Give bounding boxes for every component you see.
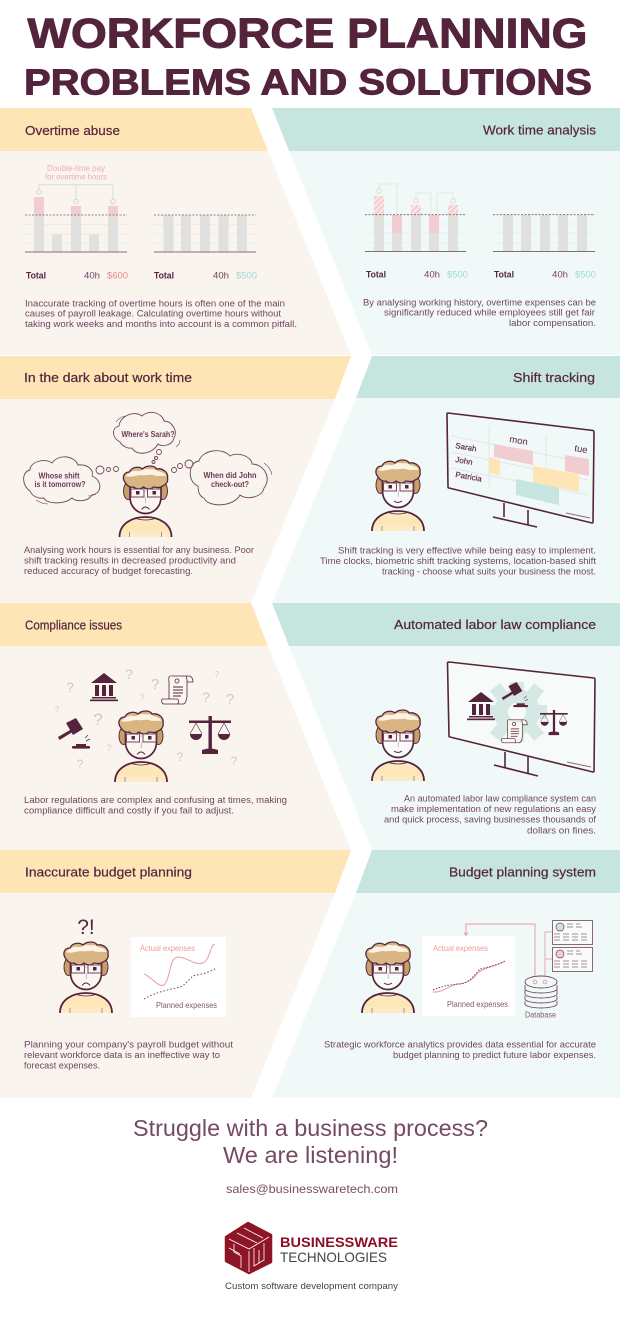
line chart: matched expenses — [422, 936, 515, 1016]
monitor with shift schedule: Sarah — [455, 441, 477, 454]
icon: happy person — [372, 710, 424, 781]
icon: gavel — [58, 718, 90, 749]
icon: gear — [487, 682, 547, 742]
text: automated compliance description: An automated labor law compliance system can — [404, 794, 596, 804]
text: shift tracking description: Time clocks, biometric shift tracking systems, location-based shift — [320, 556, 596, 567]
text: overtime abuse description: causes of payroll leakage. Calculating overtime hours without — [25, 309, 281, 320]
text: shift tracking description — [320, 546, 596, 578]
line chart: actual vs planned expenses: Actual expenses — [140, 943, 195, 953]
monitor with shift schedule: John — [455, 455, 473, 467]
question marks: ? — [66, 679, 74, 695]
header: overtime abuse — [0, 108, 268, 151]
header: budget planning system — [356, 850, 620, 893]
text: compliance issues description — [24, 795, 287, 816]
logo: businessware technologies: BUSINESSWARE — [280, 1234, 398, 1250]
line chart: matched expenses: Planned expenses — [447, 999, 508, 1009]
line chart: actual vs planned expenses: Planned expenses — [156, 1000, 217, 1010]
header: inaccurate budget planning: Inaccurate budget planning — [25, 864, 192, 880]
bar chart: redistributed hours: $500 — [447, 270, 468, 280]
contact email: sales@businesswaretech.com — [226, 1182, 398, 1196]
icon: scales — [189, 716, 231, 754]
thought bubbles: check-out? — [211, 479, 249, 489]
text: in the dark description: Analysing work hours is essential for any business. Poor — [24, 545, 255, 556]
call to action heading — [133, 1115, 488, 1168]
thought bubbles: is it tomorrow? — [34, 479, 86, 489]
text: in the dark description — [24, 545, 255, 577]
text: shift tracking description: Shift tracking is very effective while being easy to implement. — [338, 546, 596, 556]
icon: employee cards — [552, 920, 592, 972]
connector: cards to database — [545, 932, 552, 980]
text: inaccurate budget description: Planning your company's payroll budget without — [24, 1040, 233, 1050]
question marks: ? — [125, 666, 133, 682]
text: inaccurate budget description — [24, 1040, 233, 1072]
text: automated compliance description: make implementation of new regulations an easy — [391, 804, 596, 815]
title: WORKFORCE PLANNING — [28, 10, 588, 56]
bar chart: even hours — [493, 215, 596, 280]
header: work time analysis: Work time analysis — [483, 122, 597, 138]
bar chart: regular hours: Total — [154, 270, 174, 280]
line chart: matched expenses: Actual expenses — [433, 943, 488, 953]
panel: in the dark about work time — [0, 356, 351, 603]
text: compliance issues description: Labor regulations are complex and confusing at times, making — [24, 795, 287, 806]
text: inaccurate budget description: forecast expenses. — [24, 1060, 100, 1072]
question marks: ? — [151, 676, 159, 693]
header: compliance issues: Compliance issues — [25, 618, 122, 632]
panel: automated labor law compliance — [272, 603, 620, 850]
question marks: ? — [93, 710, 103, 729]
header: budget planning system: Budget planning system — [449, 864, 596, 880]
text: database label: Database — [525, 1010, 556, 1020]
bar chart: overtime hours: $600 — [107, 270, 128, 280]
text: in the dark description: shift tracking results in decreased productivity and — [24, 556, 236, 566]
question marks: ? — [140, 693, 145, 702]
header: overtime abuse: Overtime abuse — [25, 123, 120, 138]
text: work time analysis description: By analysing working history, overtime expenses can be — [363, 298, 596, 308]
monitor with shift schedule — [447, 413, 594, 527]
title — [24, 10, 592, 102]
header: inaccurate budget planning — [0, 850, 351, 893]
call to action heading: Struggle with a business process? — [133, 1115, 488, 1141]
monitor with shift schedule: tue — [573, 443, 588, 456]
icon: logo cube — [226, 1223, 271, 1273]
header: shift tracking: Shift tracking — [513, 370, 595, 385]
bar chart: regular hours: $500 — [236, 270, 257, 280]
panel: budget planning system — [272, 850, 620, 1098]
text: overtime abuse description: Inaccurate tracking of overtime hours is often one of the main — [25, 298, 285, 310]
question marks: ? — [226, 691, 234, 708]
icon: happy person — [372, 460, 424, 531]
panel: compliance issues — [0, 603, 351, 850]
bar chart: even hours: 40h — [552, 270, 568, 280]
question marks: ? — [215, 670, 220, 679]
question marks: ? — [231, 754, 238, 768]
question marks: ? — [106, 743, 112, 753]
header: in the dark about work time — [0, 356, 351, 399]
bar chart: redistributed hours: 40h — [424, 270, 440, 280]
bar chart: overtime hours — [25, 164, 128, 280]
header: in the dark about work time: In the dark about work time — [24, 370, 192, 385]
bar chart: redistributed hours — [365, 184, 468, 280]
header: shift tracking — [356, 356, 620, 398]
header: work time analysis — [272, 108, 620, 151]
bar chart: overtime hours: for overtime hours — [45, 172, 107, 182]
bar chart: overtime hours: 40h — [84, 270, 100, 280]
text: shift tracking description: tracking - choose what suits your business the most. — [382, 566, 596, 578]
header: compliance issues — [0, 603, 268, 646]
icon: scroll — [162, 676, 193, 704]
question marks: ? — [55, 705, 60, 714]
title: PROBLEMS AND SOLUTIONS — [24, 62, 592, 102]
text: budget system description: budget planning to predict future labor expenses. — [393, 1050, 596, 1061]
header: automated labor law compliance — [272, 603, 620, 646]
tagline: Custom software development company — [225, 1281, 399, 1291]
arrow: database to chart — [464, 924, 535, 980]
bar chart: regular hours — [154, 215, 257, 280]
text: overtime abuse description — [25, 298, 297, 330]
call to action heading: We are listening! — [223, 1142, 398, 1168]
text: confused mark: ?! — [77, 916, 95, 939]
question marks: ? — [77, 757, 84, 771]
text: work time analysis description — [363, 298, 596, 329]
text: inaccurate budget description: relevant workforce data is an ineffective way to — [24, 1050, 220, 1061]
text: compliance issues description: compliance difficult and costly if you fail to adjust. — [24, 806, 234, 816]
text: budget system description — [324, 1040, 596, 1061]
icon: confused person — [60, 942, 112, 1013]
monitor with shift schedule: Patricia — [455, 470, 483, 484]
header: automated labor law compliance: Automated labor law compliance — [394, 617, 596, 632]
bar chart: even hours: $500 — [575, 270, 596, 280]
panel: work time analysis — [272, 108, 620, 355]
thought bubbles: When did John — [204, 470, 256, 480]
panel: overtime abuse — [0, 108, 351, 355]
text: overtime abuse description: taking work weeks and months into account is a common pitfall. — [25, 319, 297, 330]
monitor with shift schedule: mon — [508, 434, 529, 448]
thought bubbles: Where's Sarah? — [122, 429, 174, 439]
thought bubbles — [24, 412, 272, 505]
panel: inaccurate budget planning — [0, 850, 351, 1098]
bar chart: overtime hours: Total — [26, 270, 46, 280]
monitor with compliance gear — [448, 662, 595, 776]
question marks: ? — [177, 750, 184, 764]
text: automated compliance description — [384, 794, 596, 836]
text: budget system description: Strategic workforce analytics provides data essential for accurate — [324, 1040, 596, 1050]
text: work time analysis description: significantly reduced while employees still get fair — [384, 308, 596, 319]
bar chart: even hours: Total — [494, 270, 514, 280]
text: work time analysis description: labor compensation. — [509, 318, 596, 329]
line chart: actual vs planned expenses — [131, 937, 226, 1017]
text: in the dark description: reduced accuracy of budget forecasting. — [24, 566, 193, 577]
question marks — [55, 666, 238, 771]
bar chart: redistributed hours: Total — [366, 270, 386, 280]
icon: database — [525, 976, 557, 1008]
text: automated compliance description: and quick process, saving businesses thousands of — [384, 814, 596, 826]
bar chart: regular hours: 40h — [213, 270, 229, 280]
logo: businessware technologies — [226, 1223, 398, 1273]
thought bubbles: Whose shift — [38, 470, 80, 480]
icon: confused person — [115, 711, 167, 782]
icon: confused person — [120, 466, 172, 537]
panel: shift tracking — [272, 356, 620, 603]
text: automated compliance description: dollars on fines. — [527, 826, 596, 836]
icon: bank — [90, 673, 118, 701]
bar chart: overtime hours: Double-time pay — [47, 164, 105, 173]
icon: happy person — [362, 942, 414, 1013]
logo: businessware technologies: TECHNOLOGIES — [280, 1249, 387, 1265]
question marks: ? — [202, 689, 210, 705]
